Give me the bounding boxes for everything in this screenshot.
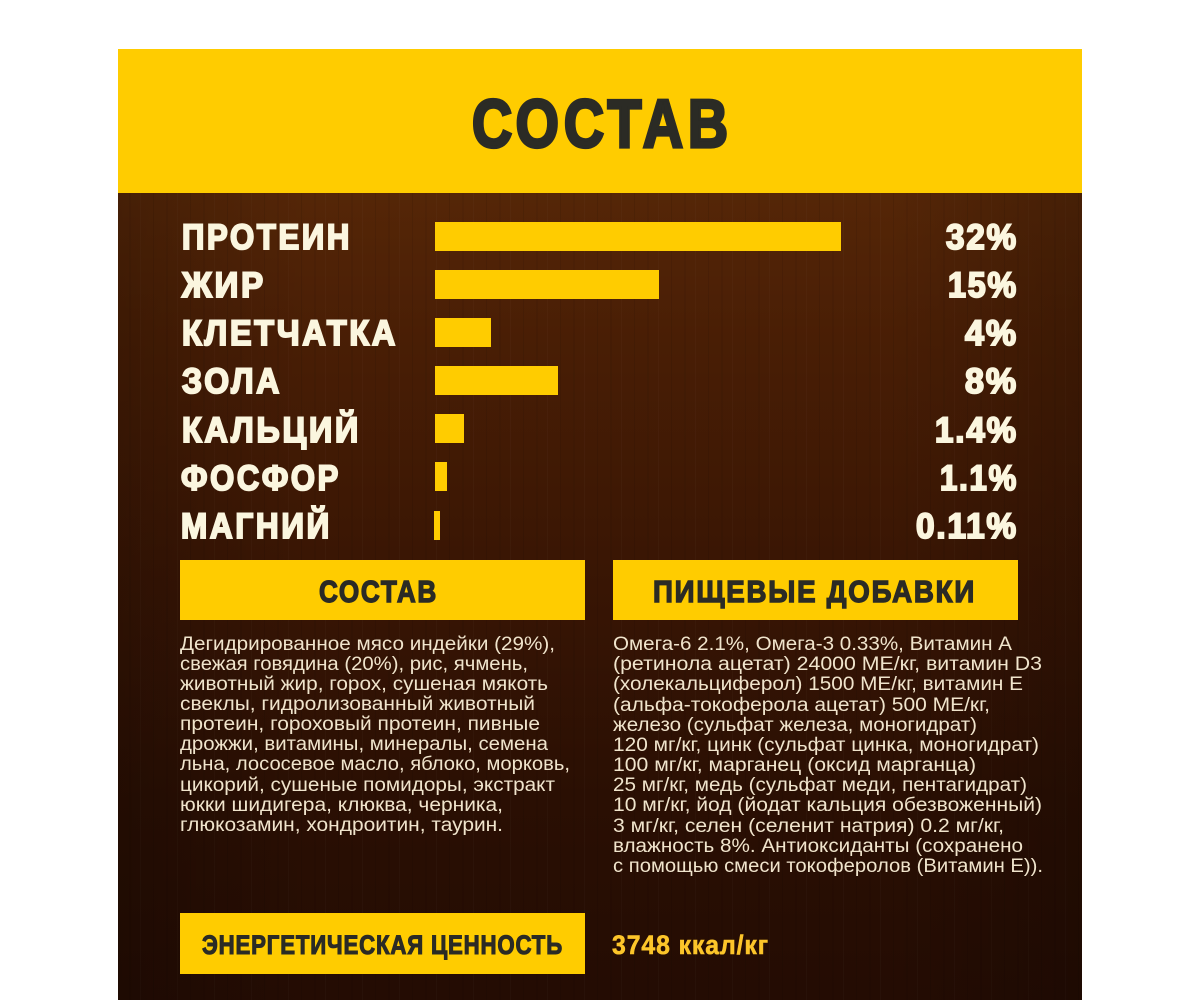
row: phosphorus: [181, 459, 1018, 498]
heading: energy value: ЭНЕРГЕТИЧЕСКАЯ ЦЕННОСТЬ: [202, 930, 563, 960]
text block: additives: (альфа-токоферола ацетат) 500 МЕ/кг,: [613, 695, 990, 716]
text block: ingredients: глюкозамин, хондроитин, таурин.: [180, 815, 503, 836]
text block: additives: 10 мг/кг, йод (йодат кальция обезвоженный): [613, 795, 1042, 816]
text block: ingredients: свеклы, гидролизованный животный: [180, 694, 535, 715]
energy value figure: 3748 ккал/кг: [612, 930, 769, 960]
row: fat: ЖИР: [181, 266, 266, 305]
row: fat: [181, 266, 1018, 305]
panel: wood background: [118, 193, 1082, 1000]
heading: composition: СОСТАВ: [319, 574, 438, 609]
header: title banner: [118, 49, 1082, 193]
text block: additives: 3 мг/кг, селен (селенит натрия) 0.2 мг/кг,: [613, 816, 1004, 837]
heading: composition: [180, 560, 585, 620]
text block: additives: 100 мг/кг, марганец (оксид марганца): [613, 755, 976, 776]
text block: additives: 120 мг/кг, цинк (сульфат цинка, моногидрат): [613, 735, 1039, 756]
title: СОСТАВ: [472, 86, 733, 162]
row: fat: 15%: [948, 266, 1018, 305]
row: calcium: 1.4%: [935, 411, 1018, 450]
text block: ingredients: свежая говядина (20%), рис, ячмень,: [180, 654, 528, 675]
heading: food additives: [613, 560, 1018, 620]
text block: additives: с помощью смеси токоферолов (Витамин Е)).: [613, 856, 1043, 877]
text block: ingredients: дрожжи, витамины, минералы, семена: [180, 734, 548, 755]
text block: ingredients: протеин, гороховый протеин, пивные: [180, 714, 540, 735]
row: fiber: [182, 314, 1018, 353]
text block: additives: (ретинола ацетат) 24000 МЕ/кг, витамин D3: [613, 654, 1042, 675]
row: phosphorus: ФОСФОР: [181, 459, 341, 498]
row: protein: ПРОТЕИН: [182, 218, 352, 257]
text block: ingredients: [180, 634, 570, 836]
text block: ingredients: Дегидрированное мясо индейки (29%),: [180, 634, 555, 655]
text block: additives: [613, 634, 1043, 877]
row: magnesium: МАГНИЙ: [181, 506, 332, 546]
row: protein: 32%: [946, 218, 1018, 257]
text block: additives: влажность 8%. Антиоксиданты (сохранено: [613, 836, 1023, 857]
text block: additives: железо (сульфат железа, моногидрат): [613, 715, 977, 736]
heading: food additives: ПИЩЕВЫЕ ДОБАВКИ: [653, 574, 976, 609]
row: ash: 8%: [965, 362, 1018, 401]
row: ash: ЗОЛА: [182, 362, 282, 401]
row: magnesium: 0.11%: [916, 507, 1018, 546]
row: phosphorus: 1.1%: [940, 459, 1018, 498]
row: calcium: КАЛЬЦИЙ: [182, 410, 361, 450]
text block: ingredients: льна, лососевое масло, яблоко, морковь,: [180, 754, 570, 775]
text block: ingredients: животный жир, горох, сушеная мякоть: [180, 674, 548, 695]
row: ash: [182, 362, 1018, 401]
text block: ingredients: юкки шидигера, клюква, черника,: [180, 795, 503, 816]
row: fiber: 4%: [965, 314, 1018, 353]
text block: ingredients: цикорий, сушеные помидоры, экстракт: [180, 775, 555, 796]
text block: additives: 25 мг/кг, медь (сульфат меди, пентагидрат): [613, 775, 1027, 796]
text block: additives: Омега-6 2.1%, Омега-3 0.33%, Витамин А: [613, 634, 1012, 655]
row: magnesium: [181, 506, 1018, 546]
heading: energy value: [180, 913, 585, 974]
row: fiber: КЛЕТЧАТКА: [182, 314, 398, 353]
bar chart: nutrient composition: [181, 218, 1018, 546]
text block: additives: (холекальциферол) 1500 МЕ/кг, витамин Е: [613, 674, 1023, 695]
row: protein: [182, 218, 1018, 257]
row: calcium: [182, 410, 1018, 450]
